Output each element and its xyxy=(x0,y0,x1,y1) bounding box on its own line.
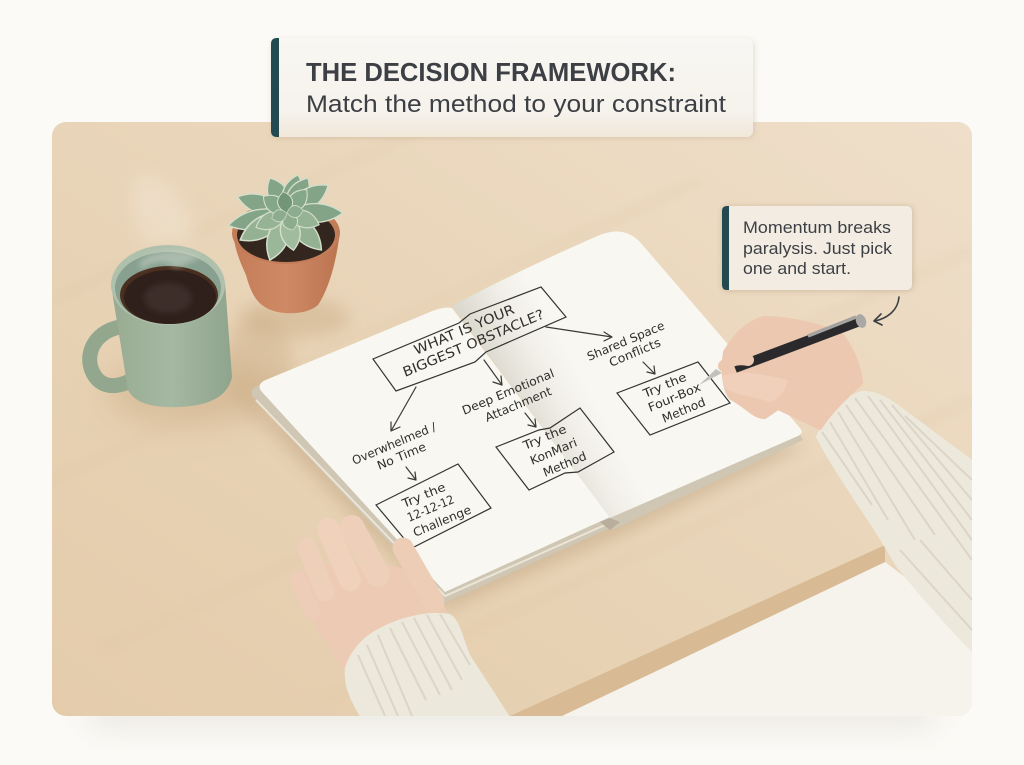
title: Match the method to your constraint xyxy=(306,91,726,118)
steam wisp xyxy=(140,251,200,270)
panel: desk scene xyxy=(52,122,975,720)
callout xyxy=(722,206,913,291)
notebook shadow xyxy=(250,410,808,610)
right sleeve xyxy=(816,391,975,655)
arrow: to konmari xyxy=(525,413,536,427)
arrow: to four-box xyxy=(643,362,655,374)
left hand xyxy=(298,515,448,613)
back of hand xyxy=(724,318,861,428)
coffee xyxy=(120,266,218,324)
icon: potted succulent xyxy=(226,172,343,313)
arrow: to overwhelmed xyxy=(391,387,416,431)
title xyxy=(271,38,754,138)
wood grain xyxy=(52,130,972,700)
right hand with pen xyxy=(699,313,868,428)
decision box: main question: WHAT IS YOUR xyxy=(412,303,517,359)
callout: Momentum breaks xyxy=(743,218,891,237)
flowchart xyxy=(350,287,730,548)
leaves xyxy=(226,172,343,263)
callout arrow xyxy=(874,297,899,325)
branch label: deep emotional attachment: Deep Emotional xyxy=(460,366,556,418)
arrow: to emotional attachment xyxy=(484,360,502,385)
floor behind desk xyxy=(560,562,972,716)
mug handle xyxy=(90,326,130,386)
branch label: overwhelmed: Overwhelmed / xyxy=(350,419,439,468)
branch label: shared space conflicts: Conflicts xyxy=(607,335,663,370)
notebook xyxy=(251,231,803,603)
left sleeve xyxy=(345,613,512,720)
index finger over pen xyxy=(724,359,748,366)
decision box: main question xyxy=(373,287,566,391)
pot shadow xyxy=(240,298,350,338)
branch label: deep emotional attachment: Attachment xyxy=(483,384,554,425)
mug rim xyxy=(111,245,225,325)
pot xyxy=(233,231,340,313)
table shadow xyxy=(90,695,934,725)
thumb xyxy=(722,373,788,402)
mug shadow xyxy=(105,358,275,426)
branch label: overwhelmed: No Time xyxy=(375,439,428,473)
soil xyxy=(237,221,335,262)
result box: konmari method: KonMari xyxy=(528,435,579,468)
result box: four-box method: Method xyxy=(660,395,707,426)
icon: steam xyxy=(134,178,190,244)
icon: coffee mug xyxy=(90,245,232,407)
result box: 12-12-12 challenge: Try the xyxy=(399,480,447,511)
arrow: to 12-12-12 xyxy=(406,467,416,480)
spine base xyxy=(600,518,620,530)
right page xyxy=(452,231,802,518)
branch label: shared space conflicts: Shared Space xyxy=(585,318,666,364)
result box: 12-12-12 challenge: 12-12-12 xyxy=(405,492,456,525)
result box: four-box method xyxy=(617,362,730,435)
result box: four-box method: Four-Box xyxy=(646,380,703,415)
result box: 12-12-12 challenge: Challenge xyxy=(411,503,473,540)
fingers xyxy=(298,527,434,612)
page edges xyxy=(251,385,803,603)
arrow: to shared space xyxy=(546,327,612,341)
result box: four-box method: Try the xyxy=(640,370,688,401)
title: THE DECISION FRAMEWORK: xyxy=(306,59,676,87)
palm xyxy=(390,566,448,613)
result box: 12-12-12 challenge xyxy=(376,464,491,548)
decision box: main question: BIGGEST OBSTACLE? xyxy=(401,307,546,381)
mug body xyxy=(111,283,232,407)
result box: konmari method: Try the xyxy=(520,422,568,453)
callout: one and start. xyxy=(743,259,851,278)
result box: konmari method: Method xyxy=(541,449,588,480)
result box: konmari method xyxy=(496,408,614,490)
left page xyxy=(260,308,610,592)
pen xyxy=(699,313,868,385)
callout: paralysis. Just pick xyxy=(743,239,893,258)
desk surface xyxy=(52,122,972,716)
desk front edge xyxy=(510,545,885,716)
